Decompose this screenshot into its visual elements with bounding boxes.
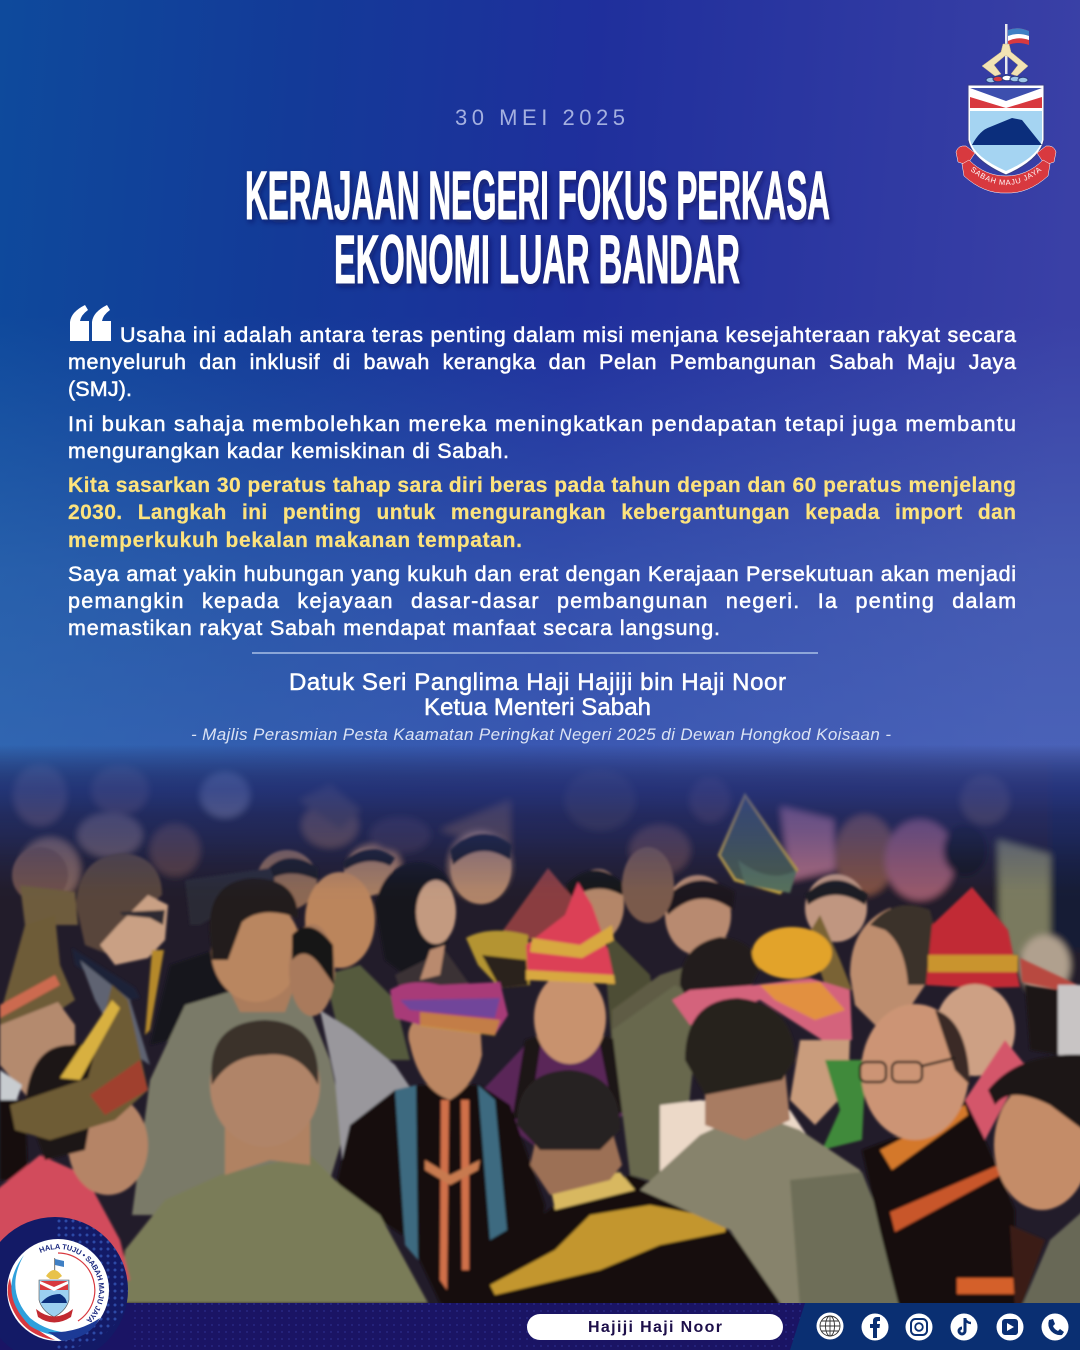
badge: Hala Tuju Sabah Maju Jaya: HALA TUJU • SABAH MAJU JAYA <box>39 1244 104 1322</box>
highlighted quote paragraph: Kita sasarkan 30 peratus tahap sara diri beras pada tahun depan dan 60 peratus menjelang <box>68 474 1016 497</box>
man with glasses at left <box>72 853 168 1065</box>
back-row faces <box>12 832 868 955</box>
quote paragraph 4: memastikan rakyat Sabah mendapat manfaat secara langsung. <box>68 616 720 640</box>
name pill: Hajiji Haji Noor <box>588 1319 722 1336</box>
motto ribbon: SABAH MAJU JAYA <box>971 167 1042 186</box>
man at lower right <box>988 1054 1080 1310</box>
shield <box>968 85 1044 175</box>
quote paragraph 4: Saya amat yakin hubungan yang kukuh dan erat dengan Kerajaan Persekutuan akan menjadi <box>68 562 1016 586</box>
speaker attribution: Datuk Seri Panglima Haji Hajiji bin Haji Noor <box>289 669 786 696</box>
quote paragraph 1: menyeluruh dan inklusif di bawah kerangka dan Pelan Pembangunan Sabah Maju Jaya <box>68 350 1016 374</box>
speaker attribution: Ketua Menteri Sabah <box>424 694 651 721</box>
quote paragraph 1: Usaha ini adalah antara teras penting dalam misi menjana kesejahteraan rakyat secara <box>120 323 1016 347</box>
highlighted quote paragraph: memperkukuh bekalan makanan tempatan. <box>68 529 522 552</box>
arms holding pole <box>982 44 1028 76</box>
quote paragraph 2: mengurangkan kadar kemiskinan di Sabah. <box>68 439 509 463</box>
man in black vest <box>335 982 545 1303</box>
man with dark hair and yellow hat <box>612 927 832 1190</box>
beads <box>986 75 1028 83</box>
icon: video play <box>996 1314 1024 1340</box>
highlighted quote paragraph <box>68 474 1016 552</box>
headscarf woman <box>375 862 470 990</box>
foreground people <box>0 795 1080 1310</box>
man in striped turban right <box>660 978 866 1172</box>
man in grey shirt <box>132 878 345 1215</box>
red hat wearer right <box>926 887 1080 1140</box>
quote paragraph 1 <box>68 323 1016 401</box>
title <box>245 157 830 298</box>
highlighted quote paragraph: 2030. Langkah ini penting untuk mengurangkan kebergantungan kepada import dan <box>68 501 1016 524</box>
badge swooshes <box>8 1255 100 1341</box>
man in khaki seen from back <box>640 998 910 1310</box>
social icons <box>816 1312 1068 1340</box>
icon: facebook <box>862 1314 888 1340</box>
badge: Hala Tuju Sabah Maju Jaya <box>0 1217 128 1348</box>
small crest <box>36 1258 73 1322</box>
man with black and yellow shirt <box>435 1070 785 1310</box>
footer bar <box>0 1303 1080 1350</box>
Sabah coat of arms <box>956 24 1056 194</box>
bald man <box>305 872 410 1060</box>
man behind, grey-white shirt <box>289 924 411 1162</box>
quote paragraph 4: pemangkin kepada kejayaan dasar-dasar pembangunan negeri. Ia penting dalam <box>68 589 1016 613</box>
icon: instagram <box>906 1314 932 1340</box>
quote paragraph 2 <box>68 412 1016 463</box>
dark suit <box>150 950 235 1045</box>
quote paragraph 1: (SMJ). <box>68 377 132 401</box>
icon: globe <box>816 1312 844 1340</box>
elder with glasses in black <box>860 1004 1015 1310</box>
icon: phone <box>1042 1314 1068 1340</box>
left headdress man <box>0 915 75 1180</box>
man with red hat centre <box>484 880 684 1146</box>
back-row headdresses <box>20 795 852 990</box>
motto ribbon <box>956 146 1056 194</box>
blue tint over top of crowd <box>0 745 1080 890</box>
icon: tiktok <box>950 1314 978 1340</box>
man with grey hair right <box>850 905 935 1030</box>
man in front with olive shirt <box>120 1020 428 1303</box>
icon: quotation mark <box>70 305 111 341</box>
speaker attribution: - Majlis Perasmian Pesta Kaamatan Peringkat Negeri 2025 di Dewan Hongkod Koisaan - <box>191 725 891 744</box>
name pill <box>527 1314 783 1340</box>
flag and pole <box>1005 24 1029 74</box>
date: 30 MEI 2025 <box>455 105 629 130</box>
left man with patterned headdress <box>0 985 148 1303</box>
crowd backdrop <box>0 720 1080 1320</box>
speaker attribution <box>191 669 891 744</box>
quote paragraph 4 <box>68 562 1016 640</box>
crowd photo <box>0 720 1080 1320</box>
quote paragraph 2: Ini bukan sahaja membolehkan mereka meningkatkan pendapatan tetapi juga membantu <box>68 412 1016 436</box>
